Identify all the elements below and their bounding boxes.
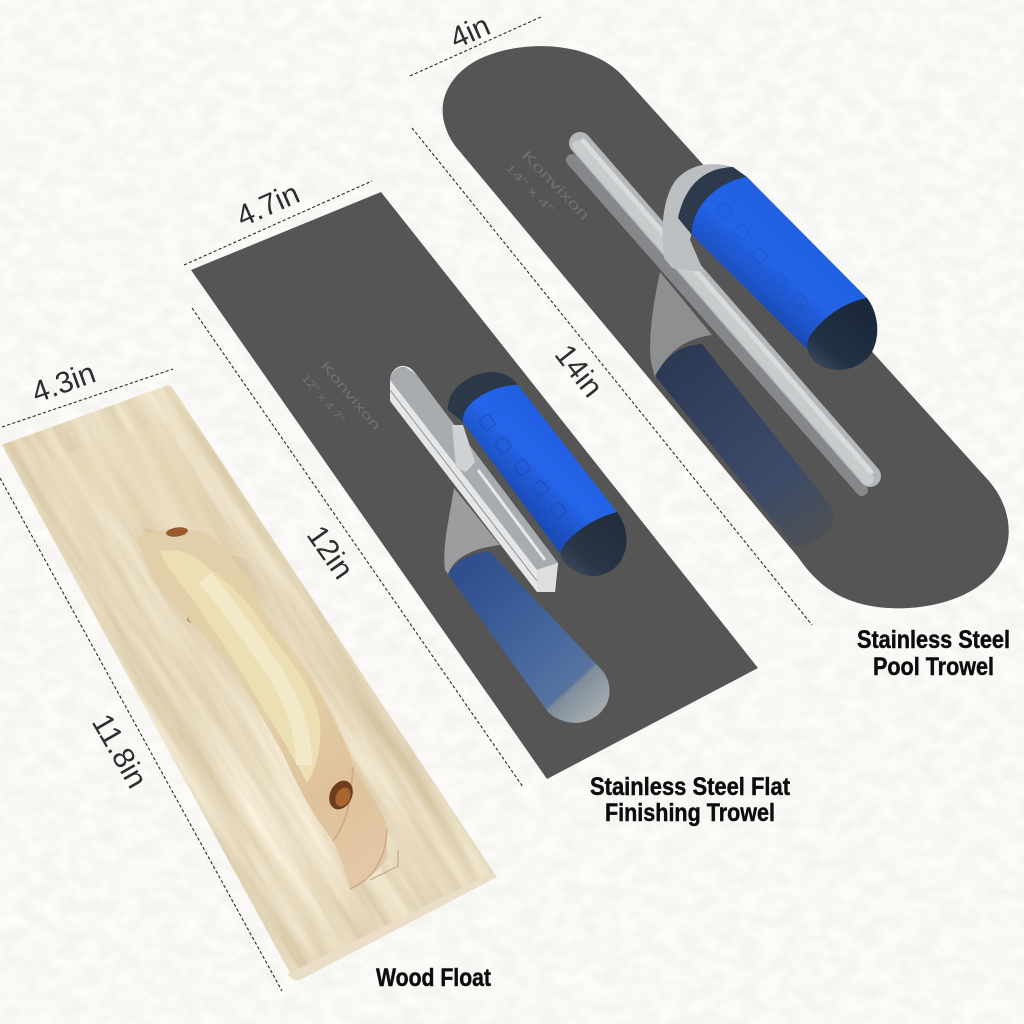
panel: stainless steel flat finishing trowel: [191, 192, 758, 779]
dimension: wood float width: [2, 356, 173, 427]
caption: pool trowel: Pool Trowel: [873, 653, 994, 681]
panel: stainless steel pool trowel: [443, 46, 1009, 608]
dimension: wood float length: [0, 478, 282, 991]
dimension: pool trowel length: [412, 128, 812, 625]
pool trowel blade logo: 14" x 4": [502, 161, 556, 216]
wood float board: [0, 344, 497, 998]
flat trowel blade logo: Konvixon: [318, 358, 384, 433]
pool trowel metal bar: [578, 141, 871, 479]
lower hole: [325, 777, 357, 813]
pool trowel grip: [678, 167, 877, 370]
flat trowel clear stem: [452, 425, 475, 472]
caption: pool trowel: [857, 626, 1010, 681]
dimension: flat trowel length: [192, 308, 523, 787]
flat trowel grip: [448, 372, 626, 576]
dimension: wood float length: 11.8in: [85, 709, 153, 794]
dimension: flat trowel length: 12in: [300, 520, 360, 585]
dimension: pool trowel length: 14in: [548, 339, 609, 404]
flat trowel blade: [191, 192, 758, 779]
dimension: flat trowel width: [184, 177, 372, 265]
flat trowel blade logo: [299, 356, 384, 447]
wood float handle: [137, 526, 398, 889]
caption: wood float: Wood Float: [376, 964, 492, 992]
pool trowel handle reflection: [572, 160, 862, 546]
dimension: wood float width: 4.3in: [28, 356, 100, 410]
caption: flat trowel: [590, 773, 791, 827]
caption: flat trowel: Stainless Steel Flat: [590, 773, 791, 801]
upper hole: [165, 526, 189, 538]
dimension: flat trowel width: 4.7in: [232, 177, 305, 234]
flat trowel handle reflection: [444, 488, 610, 723]
panel: wood float: [0, 344, 497, 998]
pool trowel blade logo: [502, 145, 593, 237]
pool trowel blade: [443, 46, 1009, 608]
dimension: pool trowel width: [410, 9, 543, 76]
caption: flat trowel: Finishing Trowel: [605, 799, 775, 827]
pool trowel clear stem and collar: [662, 164, 733, 272]
flat trowel metal bar: [390, 366, 558, 592]
flat trowel blade logo: 12" x 4.7": [299, 372, 347, 426]
pool trowel blade logo: Konvixon: [519, 147, 593, 223]
dimension: pool trowel width: 4in: [445, 9, 495, 56]
